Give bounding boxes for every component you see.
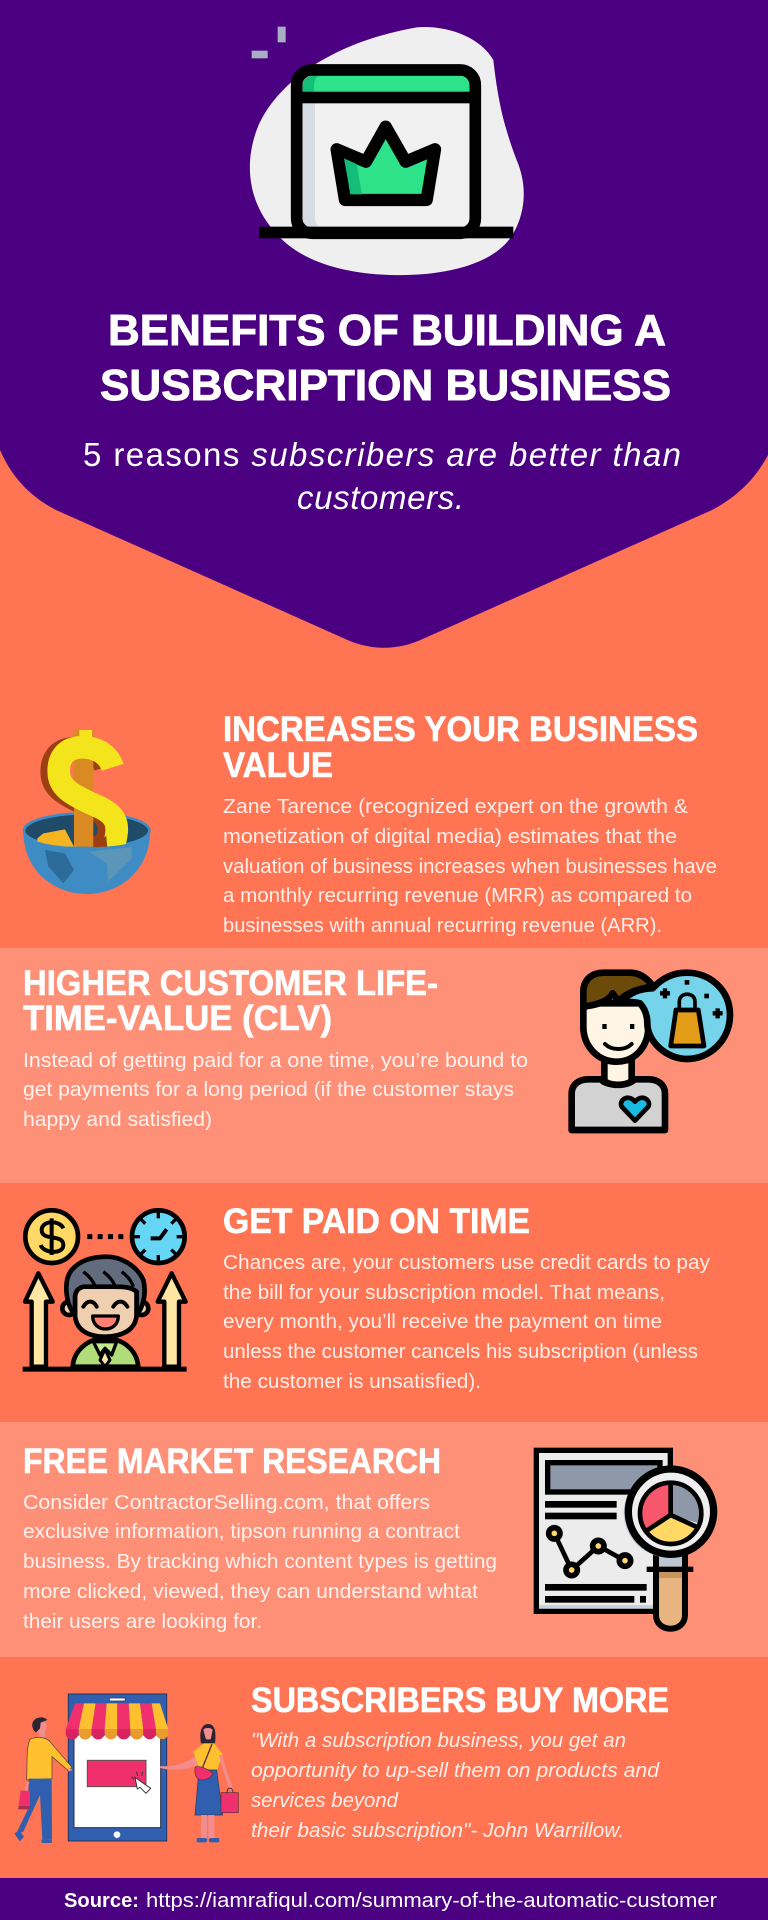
text block: market research: business. By tracking which content types is getting xyxy=(23,1550,497,1573)
subtitle: 5 reasons subscribers are better than xyxy=(83,436,681,473)
text block: paid on time: unless the customer cancels his subscription (unless xyxy=(223,1340,698,1363)
text block: business value: valuation of business increases when businesses have xyxy=(223,855,717,878)
text block: paid on time xyxy=(223,1251,711,1393)
title: BENEFITS OF BUILDING A xyxy=(108,306,666,355)
icon: dollar in globe bowl xyxy=(23,730,150,894)
text block: business value xyxy=(223,795,717,937)
heading: subscribers buy more: SUBSCRIBERS BUY MORE xyxy=(251,1681,669,1720)
heading: higher customer life-time-value: HIGHER CUSTOMER LIFE- xyxy=(23,964,438,1003)
text block: business value: monetization of digital media) estimates that the xyxy=(223,825,677,848)
heading: increases your business value: INCREASES YOUR BUSINESS xyxy=(223,710,698,749)
text block: market research: exclusive information, tipson running a contract xyxy=(23,1520,460,1543)
text block: quote: their basic subscription"- John Warrillow. xyxy=(251,1819,624,1842)
title xyxy=(100,306,671,410)
text block: customer value: happy and satisfied) xyxy=(23,1108,212,1131)
text block: paid on time: every month, you’ll receive the payment on time xyxy=(223,1310,662,1333)
icon: shop on phone with shoppers xyxy=(14,1694,238,1843)
text block: quote: services beyond xyxy=(251,1789,399,1812)
text block: customer value: get payments for a long period (if the customer stays xyxy=(23,1078,514,1101)
heading: higher customer life-time-value xyxy=(23,964,438,1038)
text block: market research: Consider ContractorSelling.com, that offers xyxy=(23,1491,430,1514)
text block: paid on time: the bill for your subscription model. That means, xyxy=(223,1281,665,1304)
heading: increases your business value xyxy=(223,710,698,785)
icon: person thinking of shopping bag xyxy=(572,973,730,1130)
panel: free market research xyxy=(0,1422,768,1657)
panel: higher customer life-time-value xyxy=(0,948,768,1183)
panel: get paid on time xyxy=(23,1202,711,1393)
text block: customer value xyxy=(23,1049,528,1131)
heading: increases your business value: VALUE xyxy=(223,746,333,785)
text block: market research xyxy=(23,1491,497,1633)
text block: business value: businesses with annual recurring revenue (ARR). xyxy=(223,914,662,937)
panel: subscribers buy more xyxy=(14,1681,669,1843)
panel: increases your business value xyxy=(23,710,717,937)
text block: market research: more clicked, viewed, they can understand whtat xyxy=(23,1580,478,1603)
text block: quote: opportunity to up-sell them on products and xyxy=(251,1759,660,1782)
heading: get paid on time: GET PAID ON TIME xyxy=(223,1202,530,1241)
text block: business value: a monthly recurring revenue (MRR) as compared to xyxy=(223,884,692,907)
title: SUSBCRIPTION BUSINESS xyxy=(100,361,671,410)
icon: happy man with coin and clock xyxy=(23,1210,187,1372)
text block: quote xyxy=(251,1729,660,1842)
footer source bar: Source: xyxy=(64,1889,139,1912)
heading: free market research: FREE MARKET RESEARCH xyxy=(23,1442,441,1481)
footer source bar xyxy=(0,1878,768,1920)
subtitle xyxy=(83,436,681,516)
text block: business value: Zane Tarence (recognized expert on the growth & xyxy=(223,795,688,818)
footer source bar: https://iamrafiqul.com/summary-of-the-automatic-customer xyxy=(146,1889,717,1912)
subtitle: customers. xyxy=(297,479,464,516)
icon: report with magnifying glass xyxy=(536,1450,714,1629)
icon: subscription window with crown xyxy=(250,27,524,275)
text block: paid on time: Chances are, your customers use credit cards to pay xyxy=(223,1251,711,1274)
text block: quote: "With a subscription business, you get an xyxy=(251,1729,626,1752)
heading: higher customer life-time-value: TIME-VALUE (CLV) xyxy=(23,999,332,1038)
text block: customer value: Instead of getting paid for a one time, you’re bound to xyxy=(23,1049,528,1072)
text block: paid on time: the customer is unsatisfied). xyxy=(223,1370,481,1393)
header panel xyxy=(0,0,768,648)
text block: market research: their users are looking for. xyxy=(23,1610,262,1633)
